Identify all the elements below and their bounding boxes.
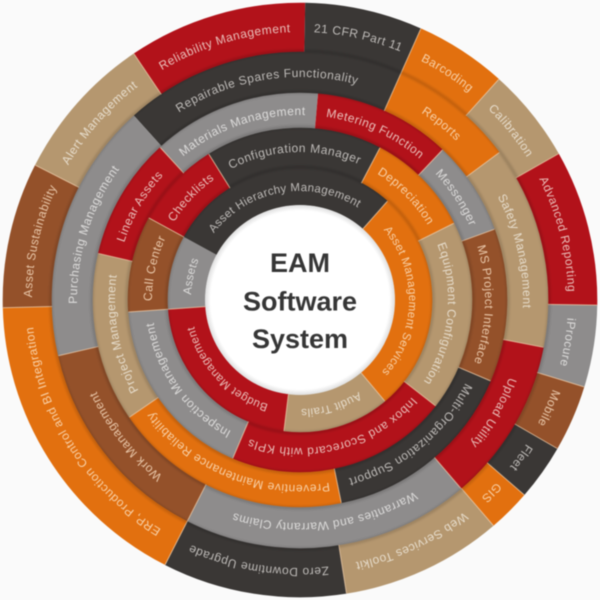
segment: Messenger bbox=[418, 150, 495, 242]
segment: Zero Downtime Upgrade bbox=[164, 521, 347, 598]
segment: Preventive Maintenance Reliability bbox=[129, 397, 342, 508]
segment: Safety Management bbox=[466, 152, 549, 348]
segment: Audit Trails: Audit Trails bbox=[301, 392, 360, 418]
segment: Upload Utility bbox=[434, 339, 544, 489]
center title: EAM Software System: Software bbox=[243, 286, 357, 316]
segment: Work Management bbox=[58, 346, 206, 522]
segment: Web Services Toolkit: Web Services Toolkit bbox=[355, 513, 470, 570]
segment: Depreciation bbox=[361, 147, 454, 242]
segment: Checklists bbox=[148, 154, 230, 237]
segment: Inbox and Scorecard with KPIs bbox=[232, 381, 436, 473]
segment: Asset Sustainability bbox=[2, 164, 79, 308]
segment: Repairable Spares Functionality: Repairable Spares Functionality bbox=[175, 68, 359, 112]
segment: Configuration Manager bbox=[208, 127, 380, 188]
ring 3 bbox=[92, 92, 508, 508]
segment: Calibration bbox=[466, 78, 559, 178]
segment: Upload Utility: Upload Utility bbox=[470, 378, 517, 448]
segment: GIS bbox=[461, 462, 525, 526]
segment: Barcoding bbox=[400, 28, 500, 116]
segment: Materials Management: Materials Management bbox=[178, 107, 306, 156]
segment: Inbox and Scorecard with KPIs: Inbox and Scorecard with KPIs bbox=[248, 397, 418, 458]
center white circle bbox=[205, 205, 395, 395]
segment: Equipment Configuration bbox=[404, 223, 473, 406]
segment: GIS: GIS bbox=[482, 484, 502, 503]
segment: iProcure bbox=[537, 304, 598, 388]
segment: Metering Function bbox=[314, 93, 443, 176]
segment: 21 CFR Part 11 bbox=[304, 2, 422, 74]
segment: Assets bbox=[167, 236, 217, 310]
segment: Inspection Management: Inspection Management bbox=[146, 322, 231, 438]
segment: MS Project Interface: MS Project Interface bbox=[474, 244, 494, 364]
segment: Linear Assets: Linear Assets bbox=[116, 172, 163, 242]
segment: Inspection Management bbox=[128, 309, 248, 459]
segment: Call Center bbox=[127, 218, 184, 312]
segment: Barcoding: Barcoding bbox=[421, 53, 473, 94]
segment: Budget Management bbox=[174, 308, 297, 423]
segment: Asset Hierarchy Management bbox=[200, 146, 377, 312]
segment: Checklists: Checklists bbox=[168, 174, 214, 221]
segment: Audit Trails bbox=[286, 359, 373, 440]
segment: Alert Management: Alert Management bbox=[62, 81, 138, 166]
segment: iProcure: iProcure bbox=[560, 318, 576, 366]
segment: Purchasing Management: Purchasing Management bbox=[68, 166, 120, 304]
segment: Safety Management: Safety Management bbox=[498, 194, 532, 308]
segment: Metering Function: Metering Function bbox=[326, 108, 424, 159]
segment: Fleet bbox=[487, 424, 558, 496]
segment: Linear Assets bbox=[98, 147, 184, 262]
segment: Assets: Assets bbox=[183, 258, 198, 295]
ring 2 bbox=[127, 127, 473, 473]
segment: Equipment Configuration: Equipment Configuration bbox=[424, 242, 456, 384]
segment: Alert Management bbox=[34, 53, 162, 188]
segment: Project Management: Project Management bbox=[108, 274, 138, 394]
segment: Advanced Reporting: Advanced Reporting bbox=[538, 178, 576, 292]
segment: Web Services Toolkit bbox=[338, 488, 494, 594]
segment: Reliability Management bbox=[134, 2, 306, 94]
segment: 21 CFR Part 11: 21 CFR Part 11 bbox=[314, 24, 402, 52]
segment: Multi-Organization Support: Multi-Organization Support bbox=[348, 383, 473, 486]
segment: Reports bbox=[384, 73, 500, 177]
segment: Purchasing Management bbox=[51, 116, 162, 356]
segment: Zero Downtime Upgrade: Zero Downtime Upgrade bbox=[189, 545, 329, 577]
segment: Project Management bbox=[92, 253, 158, 417]
segment: Warranties and Warranty Claims bbox=[188, 458, 461, 549]
segment: Call Center: Call Center bbox=[143, 235, 165, 301]
segment: Asset Management Services: Asset Management Services bbox=[382, 227, 416, 376]
segment: Reports: Reports bbox=[422, 106, 460, 140]
segment: Asset Management Services bbox=[289, 215, 460, 388]
segment: Preventive Maintenance Reliability: Preventive Maintenance Reliability bbox=[147, 412, 330, 494]
segment: Reliability Management: Reliability Management bbox=[158, 24, 291, 70]
segment: Budget Management: Budget Management bbox=[174, 321, 273, 423]
segment: Multi-Organization Support bbox=[334, 367, 492, 504]
segment: Work Management: Work Management bbox=[90, 391, 161, 482]
segment: Fleet: Fleet bbox=[510, 444, 534, 471]
segment: Depreciation: Depreciation bbox=[378, 166, 433, 225]
center title: EAM Software System: System bbox=[252, 324, 348, 354]
ring 1: inner ring bbox=[167, 168, 433, 433]
segment: Asset Hierarchy Management: Asset Hierarchy Management bbox=[209, 182, 362, 234]
segment: Mobile bbox=[514, 372, 585, 449]
segment: Calibration: Calibration bbox=[489, 104, 532, 157]
segment: Repairable Spares Functionality bbox=[134, 51, 401, 146]
segment: Advanced Reporting bbox=[516, 153, 598, 306]
segment: Configuration Manager: Configuration Manager bbox=[228, 143, 362, 168]
segment: Materials Management bbox=[160, 92, 318, 173]
segment: Warranties and Warranty Claims: Warranties and Warranty Claims bbox=[232, 492, 419, 531]
segment: ERP, Production Control and BI Integration bbox=[2, 306, 188, 566]
segment: Asset Sustainability: Asset Sustainability bbox=[23, 184, 58, 298]
segment: ERP, Production Control and BI Integration: ERP, Production Control and BI Integration bbox=[26, 327, 161, 536]
segment: Messenger: Messenger bbox=[436, 168, 476, 224]
segment: Mobile: Mobile bbox=[538, 390, 561, 426]
center title: EAM Software System: EAM bbox=[270, 248, 330, 278]
segment: MS Project Interface bbox=[458, 229, 508, 381]
